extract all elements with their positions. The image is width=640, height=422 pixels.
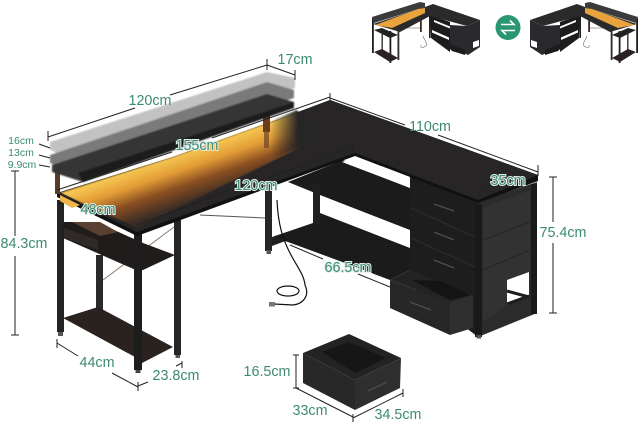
- dimension labels: 35cm: [491, 173, 525, 189]
- dimension labels: 16.5cm: [244, 364, 290, 380]
- dimension labels: 84.3cm: [1, 236, 47, 252]
- dimension labels: 33cm: [293, 403, 327, 419]
- dimension labels: 23.8cm: [153, 368, 199, 384]
- dimension labels: 120cm: [235, 178, 277, 194]
- dimension labels: 120cm: [129, 93, 171, 109]
- right section frame and shelves: [200, 158, 410, 280]
- dimension lines: [11, 59, 557, 422]
- icon: swap arrows badge: [496, 15, 520, 40]
- left frame legs and shelves: [57, 200, 181, 373]
- dimension labels: 155cm: [176, 138, 218, 154]
- shelf riser posts: [55, 92, 270, 194]
- dimension labels: 48cm: [81, 202, 115, 218]
- dimension labels: 13cm: [8, 147, 34, 159]
- drawer cabinet: [410, 175, 537, 338]
- power cable and plug: [269, 200, 307, 306]
- dimension labels: 75.4cm: [540, 225, 586, 241]
- desktop with LED glow: [57, 100, 538, 236]
- monitor shelf at three heights: [50, 72, 295, 182]
- dimension labels: 66.5cm: [325, 260, 371, 276]
- dimension labels: 16cm: [8, 135, 34, 147]
- desk thumbnail: right-hand orientation: [530, 2, 638, 63]
- removed drawer: [303, 334, 401, 410]
- dimension labels: 110cm: [409, 119, 451, 135]
- open drawer pulled out of the cabinet: [390, 270, 473, 335]
- dimension labels: 17cm: [278, 52, 312, 68]
- desk thumbnail: left-hand orientation: [372, 2, 480, 63]
- dimension labels: 44cm: [80, 355, 114, 371]
- dimension labels: 9.9cm: [8, 159, 37, 171]
